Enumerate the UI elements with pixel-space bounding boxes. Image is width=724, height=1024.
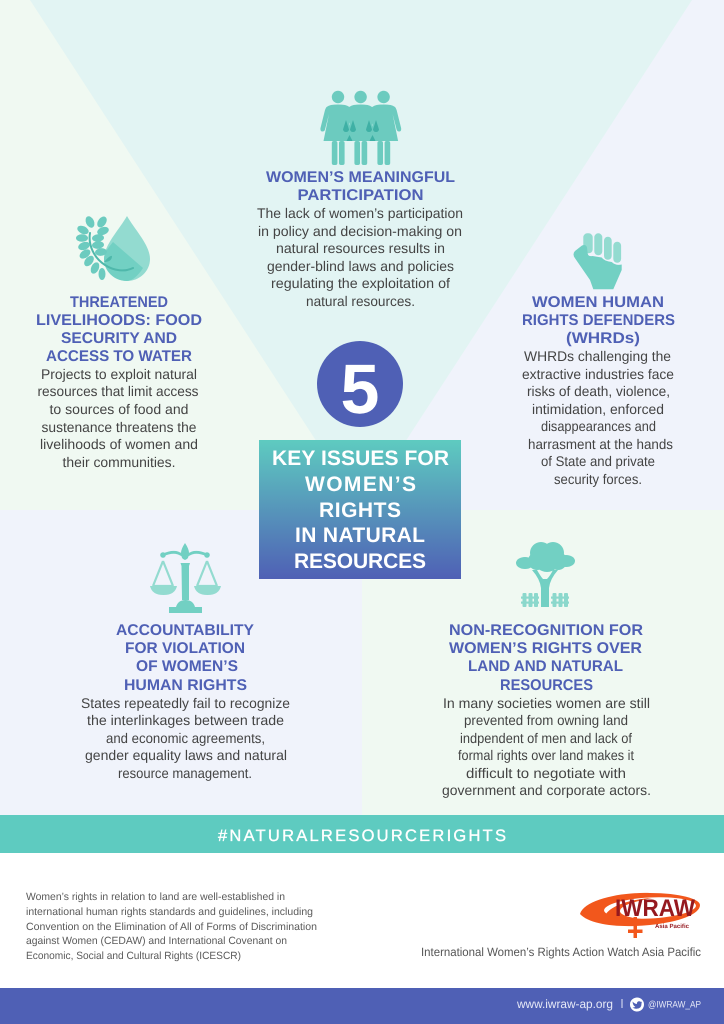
icon: scales of justice <box>150 543 221 613</box>
panel: threatened livelihoods background <box>0 0 362 510</box>
heading: non-recognition: WOMEN’S RIGHTS OVER <box>449 640 642 657</box>
text: footer note: international human rights standards and guidelines, including <box>26 906 313 918</box>
panel: non-recognition background <box>362 510 724 815</box>
heading: threatened livelihoods: LIVELIHOODS: FOOD <box>36 312 202 329</box>
footer band: www.iwraw-ap.org <box>516 997 613 1011</box>
text: threatened livelihoods body: Projects to exploit natural <box>41 366 197 382</box>
heading: threatened livelihoods: SECURITY AND <box>61 330 177 347</box>
heading: accountability: HUMAN RIGHTS <box>124 677 247 694</box>
text: non-recognition body: prevented from owning land <box>464 712 628 728</box>
text: accountability body: the interlinkages between trade <box>87 712 284 728</box>
text: WHRDs body <box>522 348 674 487</box>
number badge: 5 <box>317 341 403 428</box>
icon: tree and fence <box>516 542 575 607</box>
text: non-recognition body: indpendent of men and lack of <box>460 730 632 746</box>
text: WHRDs body: disappearances and <box>541 418 656 434</box>
text: WHRDs body: risks of death, violence, <box>527 383 670 399</box>
logo: IWRAW: IWRAW <box>615 895 695 922</box>
text: organisation name: International Women’s Rights Action Watch Asia Pacific <box>421 945 701 959</box>
hashtag band <box>0 815 724 853</box>
text: threatened livelihoods body: to sources of food and <box>50 401 188 417</box>
heading: accountability <box>116 622 255 694</box>
text: participation body: gender-blind laws and policies <box>267 258 454 274</box>
text: footer note <box>26 891 317 962</box>
text: threatened livelihoods body: their communities. <box>62 454 176 470</box>
text: WHRDs body: security forces. <box>554 471 642 487</box>
heading: accountability: ACCOUNTABILITY <box>116 622 255 639</box>
title box: WOMEN’S <box>305 473 416 496</box>
text: threatened livelihoods body: livelihoods of women and <box>40 436 198 452</box>
panel: accountability background <box>0 510 362 815</box>
text: accountability body <box>81 695 290 781</box>
heading: non-recognition: RESOURCES <box>500 677 593 694</box>
text: non-recognition body: In many societies women are still <box>443 695 650 711</box>
title box: RIGHTS <box>319 499 401 522</box>
panel: WHRDs background <box>362 0 724 510</box>
text: non-recognition body: government and corporate actors. <box>442 782 651 798</box>
heading: women human rights defenders: (WHRDs) <box>566 330 640 347</box>
footer band <box>0 988 724 1024</box>
icon: water drop and branch <box>76 215 150 281</box>
heading: threatened livelihoods: THREATENED <box>70 294 168 311</box>
heading: non-recognition <box>449 622 643 694</box>
footer band: @IWRAW_AP <box>648 1000 701 1010</box>
text: non-recognition body: difficult to negotiate with <box>466 765 626 781</box>
text: WHRDs body: intimidation, enforced <box>532 401 664 417</box>
text: threatened livelihoods body <box>38 366 198 470</box>
text: participation body: in policy and decision-making on <box>258 223 462 239</box>
title box: IN NATURAL <box>295 524 425 547</box>
heading: accountability: FOR VIOLATION <box>125 640 245 657</box>
title box: KEY ISSUES FOR <box>272 447 449 470</box>
text: threatened livelihoods body: resources that limit access <box>38 383 198 399</box>
text: accountability body: and economic agreements, <box>106 730 265 746</box>
heading: accountability: OF WOMEN’S <box>136 658 238 675</box>
text: participation body: natural resources. <box>306 293 415 309</box>
text: footer note: Convention on the Elimination of All of Forms of Discrimination <box>26 921 317 933</box>
heading: threatened livelihoods <box>36 294 202 365</box>
heading: women's meaningful participation: WOMEN’S MEANINGFUL <box>266 169 455 186</box>
hashtag band: #NATURALRESOURCERIGHTS <box>218 827 506 845</box>
text: accountability body: resource management. <box>118 765 252 781</box>
heading: non-recognition: NON-RECOGNITION FOR <box>449 622 643 639</box>
text: WHRDs body: of State and private <box>541 453 655 469</box>
heading: women human rights defenders: RIGHTS DEFENDERS <box>522 312 675 329</box>
logo: IWRAW: Asia Pacific <box>655 923 690 930</box>
text: WHRDs body: WHRDs challenging the <box>524 348 671 364</box>
heading: women's meaningful participation <box>266 169 455 204</box>
text: footer note: Women’s rights in relation to land are well-established in <box>26 891 285 903</box>
text: footer note: against Women (CEDAW) and International Covenant on <box>26 935 287 947</box>
title box <box>259 440 461 579</box>
text: non-recognition body: formal rights over land makes it <box>458 747 634 763</box>
panel: meaningful participation background <box>30 0 692 510</box>
icon: three women <box>320 91 401 165</box>
text: non-recognition body <box>442 695 651 798</box>
text: accountability body: gender equality laws and natural <box>85 747 287 763</box>
heading: women's meaningful participation: PARTICIPATION <box>298 187 424 204</box>
text: accountability body: States repeatedly fail to recognize <box>81 695 290 711</box>
number badge: 5: 5 <box>341 350 379 428</box>
text: footer note: Economic, Social and Cultural Rights (ICESCR) <box>26 950 241 962</box>
title box: RESOURCES <box>294 550 426 573</box>
heading: non-recognition: LAND AND NATURAL <box>468 658 623 675</box>
text: participation body: regulating the exploitation of <box>271 275 450 291</box>
text: participation body <box>257 205 463 309</box>
text: participation body: The lack of women’s participation <box>257 205 463 221</box>
logo: IWRAW <box>580 893 700 938</box>
text: WHRDs body: harrasment at the hands <box>528 436 673 452</box>
text: threatened livelihoods body: sustenance threatens the <box>42 419 197 435</box>
heading: threatened livelihoods: ACCESS TO WATER <box>46 348 192 365</box>
text: participation body: natural resources results in <box>276 240 445 256</box>
heading: women human rights defenders: WOMEN HUMAN <box>532 294 664 311</box>
heading: women human rights defenders <box>522 294 675 347</box>
text: WHRDs body: extractive industries face <box>522 366 674 382</box>
icon: raised fist <box>574 233 622 289</box>
